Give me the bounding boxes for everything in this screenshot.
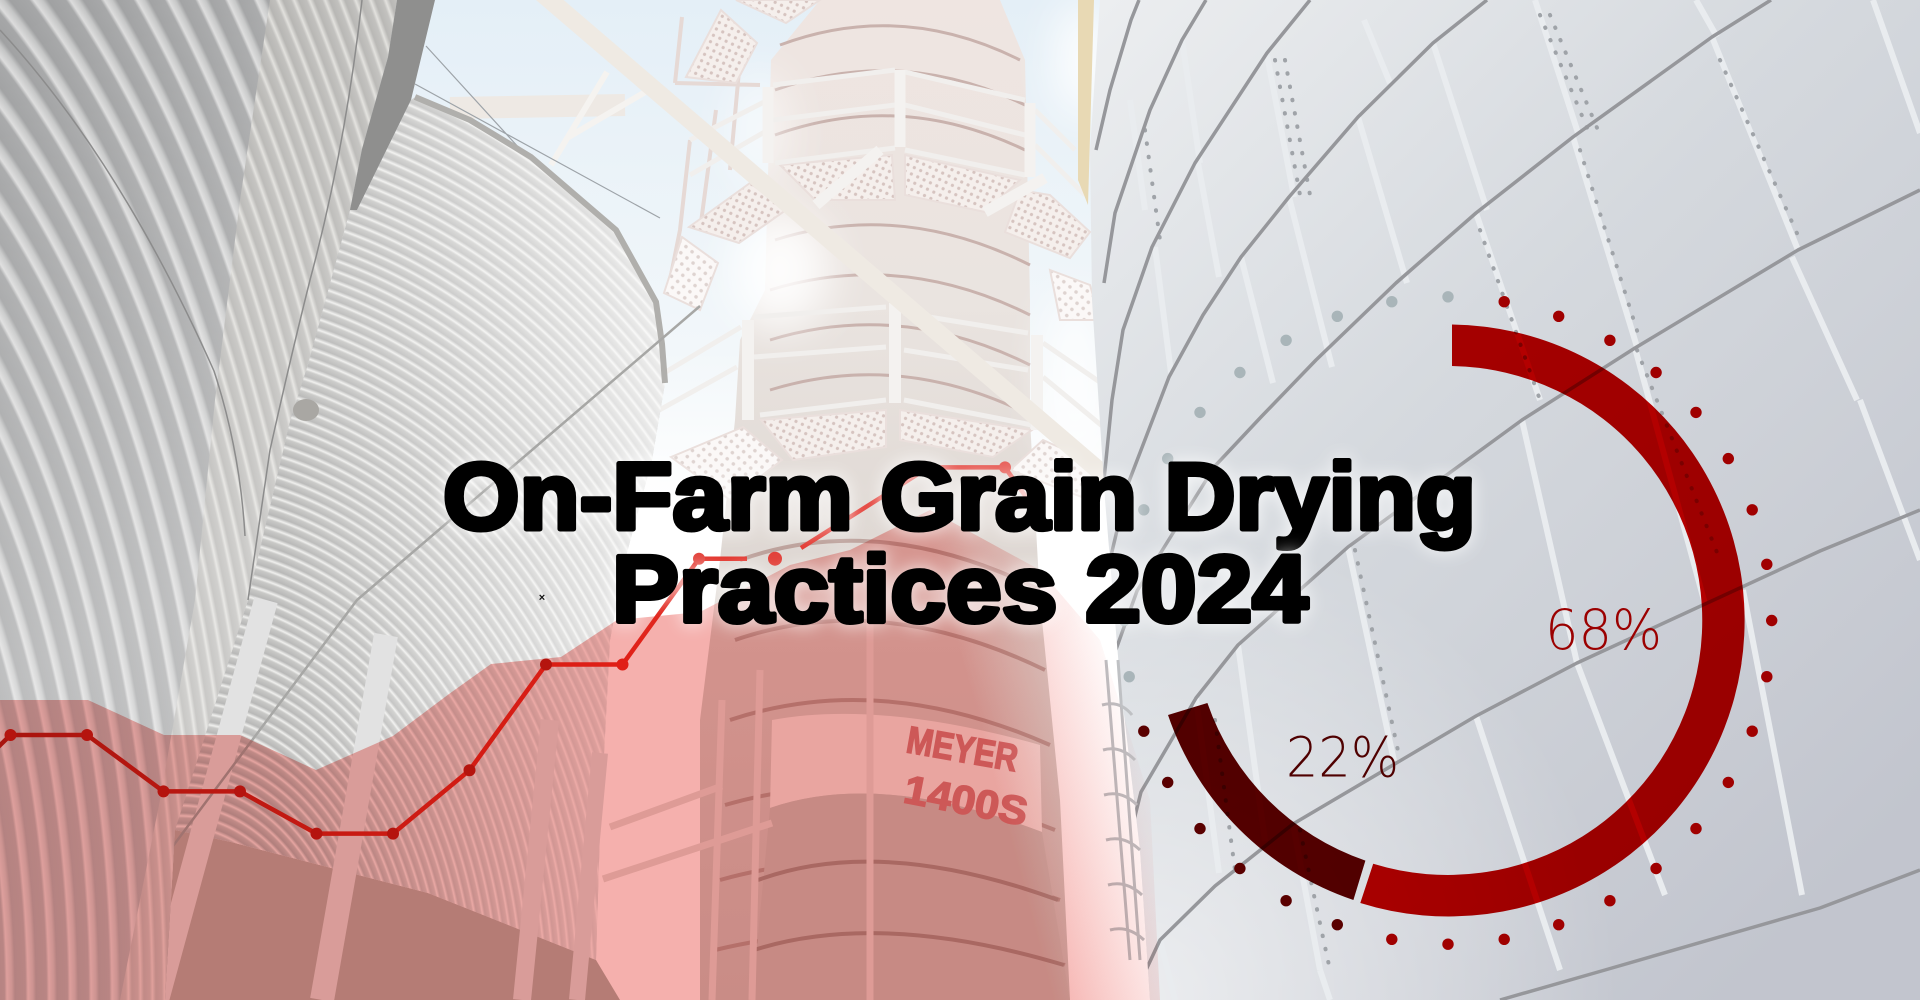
panel ribs xyxy=(1130,0,1920,1000)
right steel bin xyxy=(1080,0,1920,1000)
second grain bin xyxy=(175,97,665,960)
label 68 percent: 68% xyxy=(1545,598,1662,662)
dryer tower body xyxy=(700,0,1070,1000)
bin corrugation xyxy=(175,97,665,960)
lower platform rails xyxy=(654,303,1107,430)
donut chart xyxy=(1119,291,1777,950)
small x mark: × xyxy=(539,592,545,604)
bin seam xyxy=(0,0,362,600)
tower manufacturer logo xyxy=(900,720,1031,835)
ladder cage on right bin xyxy=(1102,660,1144,960)
tower ring bands xyxy=(715,26,1065,965)
title xyxy=(443,444,1476,642)
red area chart band xyxy=(0,510,1160,1000)
lighter logo band on tower xyxy=(770,714,1042,832)
upper platform rails xyxy=(690,70,1085,212)
lower left highlight xyxy=(1122,682,1498,1000)
lower tower rings xyxy=(754,862,1064,965)
auger pipe xyxy=(530,0,1110,480)
bin highlight xyxy=(0,0,397,1000)
steel panels xyxy=(1080,0,1920,1000)
vertical bracing posts xyxy=(157,600,600,1000)
lower silo shadow xyxy=(165,830,620,1000)
long diagonal wire xyxy=(0,306,700,893)
tick dots: grey unfilled portion xyxy=(1119,291,1454,682)
data points xyxy=(4,461,1011,840)
darker lower tower xyxy=(752,794,1070,1000)
label 22 percent: 22% xyxy=(1286,726,1399,790)
tower manufacturer logo: 1400S xyxy=(900,768,1031,835)
large grain bin xyxy=(0,0,435,1000)
curved panel seams xyxy=(1096,0,1920,1000)
bin eave xyxy=(350,0,435,210)
tick dots: red 68 percent xyxy=(1386,296,1777,950)
bin corrugation left xyxy=(0,0,397,1000)
support beam and wires in the sky xyxy=(415,46,660,298)
title line 1: On-Farm Grain Drying xyxy=(443,444,1476,550)
line trend xyxy=(0,467,1026,834)
ring segment 22 percent xyxy=(1168,703,1365,900)
bin rim xyxy=(415,97,665,383)
lower platform grating xyxy=(671,270,1110,500)
steam on tower xyxy=(730,0,1115,470)
tower manufacturer logo: MEYER xyxy=(903,720,1021,780)
tick dots: dark 22 percent xyxy=(1138,726,1343,930)
tower service ladder posts xyxy=(603,560,870,1000)
red line chart xyxy=(0,461,1026,840)
left scaffold posts xyxy=(668,17,760,290)
rivet lines xyxy=(1145,15,1800,970)
ring segment 68 percent xyxy=(1360,324,1745,916)
bin highlight xyxy=(175,97,665,960)
vent fixture xyxy=(293,399,319,421)
bin corrugation right xyxy=(120,0,397,1000)
tan pipe beside right silo xyxy=(1078,0,1094,205)
upper platform grating xyxy=(664,0,1090,310)
title line 2: Practices 2024 xyxy=(612,536,1308,642)
